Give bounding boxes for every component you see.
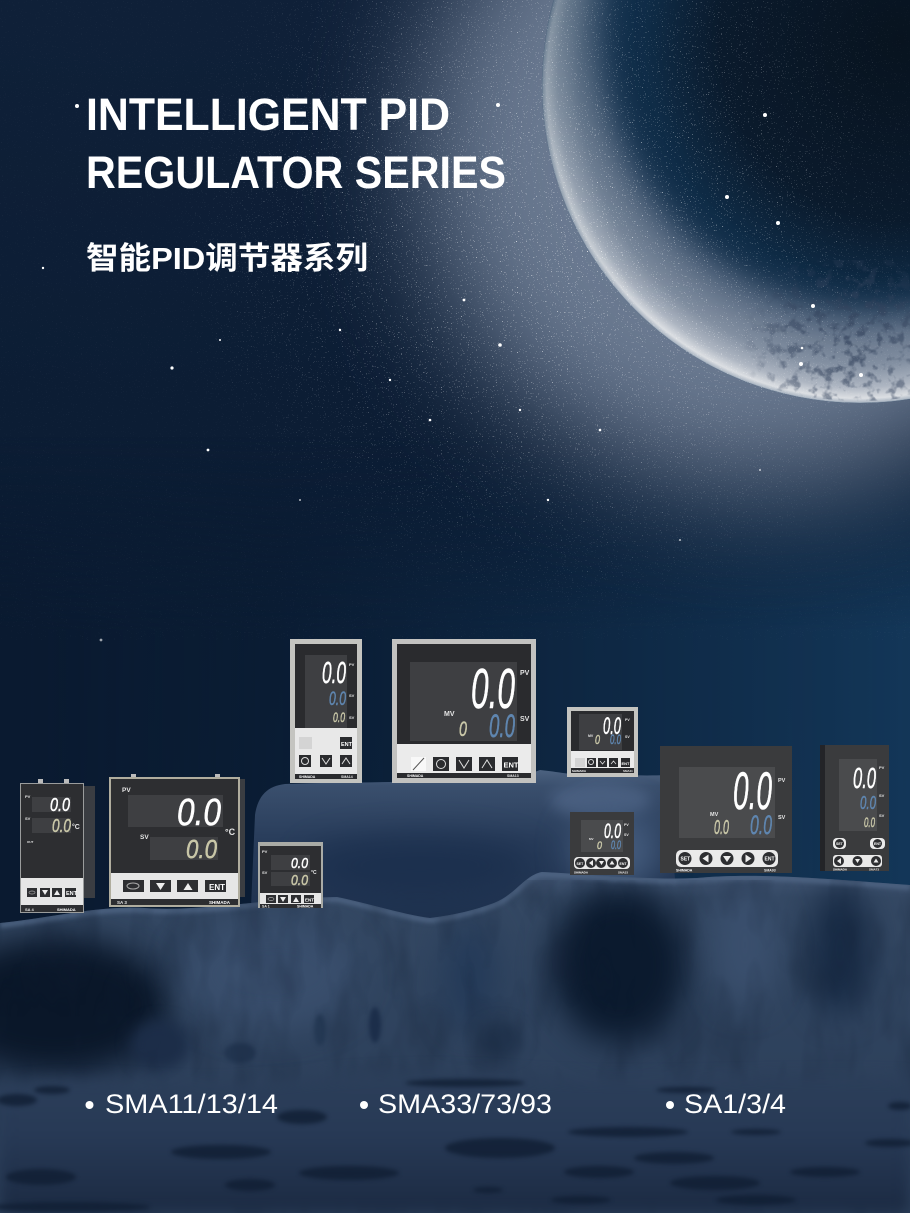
device: SMA33 controller: 0 [597,840,603,852]
device: SMA13 controller: SHIMADA [407,774,424,778]
device: SA3 controller: 0.0 [186,834,217,864]
title: INTELLIGENT PID [86,89,450,140]
device: SMA93 controller: 0.0 [714,817,729,839]
device: SMA11 controller: 0.0 [603,713,621,740]
device: SMA73 controller: 0.0 [853,763,876,795]
device: SA1 controller: SV [262,870,268,875]
device: SMA93 controller: ENT [764,856,774,862]
device: SMA33 controller: SET [576,862,584,866]
device: SMA93 controller [660,746,792,873]
terrain: front ledge [0,860,910,1213]
device: SMA13 controller: ENT [504,760,519,770]
device: SMA93 controller: 0.0 [733,762,772,821]
device: SA4 controller: °C [72,823,80,831]
device: SMA13 controller: SV [520,716,530,723]
device: SA3 controller: SHIMADA [209,900,231,905]
device: SMA14 controller: SV [349,715,355,720]
device: SMA33 controller: SV [624,833,629,837]
device: SA3 controller: °C [225,827,236,837]
device: SMA11 controller: SHIMADA [572,769,587,773]
device: SMA73 controller: SV [879,813,885,818]
background: night sky [370,476,910,885]
device: SMA93 controller: MV [710,812,719,818]
device: SMA13 controller: 0.0 [489,708,515,744]
device: SA1 controller: SA 1 [262,904,270,908]
device: SMA11 controller: ENT [622,761,630,766]
device: SMA33 controller: MV [589,837,594,841]
device: SMA14 controller: SMA14 [341,775,353,779]
device: SMA11 controller: PV [625,718,630,722]
device: SMA73 controller: SV [879,793,885,798]
device: SMA73 controller [820,745,889,871]
device: SMA93 controller: PV [778,778,786,784]
device: SMA93 controller: SV [778,815,786,821]
device: SMA11 controller: SV [625,735,630,739]
title: REGULATOR SERIES [86,147,506,198]
device: SMA13 controller: 0.0 [471,657,515,721]
device: SMA73 controller: SET [836,842,844,846]
device: SMA14 controller: SV [349,693,355,698]
device: SA1 controller [258,842,323,908]
device: SMA33 controller: SHIMADA [574,870,589,874]
device: SMA73 controller: 0.0 [864,814,875,830]
device: SMA93 controller: SHIMADA [676,868,693,872]
device: SMA93 controller: 0.0 [750,810,772,840]
device: SA4 controller [20,779,95,913]
device: SMA14 controller: SHIMADA [299,775,316,779]
device: SMA13 controller [392,639,536,783]
terrain: ground with craters [0,1072,910,1213]
device: SA1 controller: °C [311,870,317,876]
device: SA1 controller: ENT [305,898,314,902]
device: SA4 controller: SA 4 [25,907,35,912]
device: SMA14 controller: 0.0 [329,689,346,710]
device: SMA14 controller: 0.0 [333,709,345,725]
device: SA3 controller: 0.0 [177,792,221,834]
device: SMA11 controller: SMA11 [623,769,633,773]
device: SMA33 controller: 0.0 [611,838,621,852]
device: SMA13 controller: 0 [459,718,467,741]
device: SA4 controller: 0.0 [50,795,70,815]
device: SMA33 controller [570,812,634,875]
device: SA4 controller: PV [25,794,31,799]
device: SMA14 controller: 0.0 [322,655,346,690]
device: SA3 controller: SA 3 [117,900,127,905]
title [86,89,506,198]
device: SMA11 controller [567,707,638,777]
device: SMA13 controller: MV [444,711,455,718]
star field [0,0,910,641]
device: SMA73 controller: SMA73 [869,867,879,871]
device: SA4 controller: SHIMADA [57,907,76,912]
device: SMA73 controller: SHIMADA [833,867,848,871]
device: SA4 controller: ENT [66,891,78,897]
device: SMA33 controller: ENT [620,862,627,866]
label: SMA33/73/93: SMA33/73/93 [378,1089,552,1119]
device: SA1 controller: PV [262,849,268,854]
device: SMA11 controller: 0 [595,732,601,747]
label: SMA11/13/14: SMA11/13/14 [105,1089,278,1119]
device: SMA73 controller: ENT [874,842,882,846]
device: SMA93 controller: SET [680,856,690,862]
device: SMA73 controller: 0.0 [860,793,876,813]
device: SMA14 controller: ENT [341,742,353,748]
moon [542,0,910,410]
device: SA4 controller: SV [25,816,31,821]
device: SMA33 controller: PV [624,823,629,827]
terrain: upper ledge [250,770,680,930]
label: SA1/3/4: SA1/3/4 [684,1089,786,1119]
subtitle: 智能PID调节器系列 [86,241,368,276]
device: SA4 controller: 0.0 [52,816,71,836]
device: SA4 controller: OUT [27,840,34,844]
device: SMA73 controller: PV [879,765,885,770]
device: SA3 controller: PV [122,787,131,794]
device: SMA11 controller: MV [588,734,594,738]
device: SMA14 controller [290,639,362,783]
moon glow haze [420,0,910,490]
device: SMA13 controller: PV [520,670,530,677]
device: SMA33 controller: 0.0 [604,820,621,843]
device: SA3 controller: SV [140,834,149,841]
device: SA1 controller: 0.0 [291,872,309,889]
device: SMA33 controller: SMA33 [618,870,628,874]
device: SA3 controller: ENT [209,883,225,892]
device: SA1 controller: 0.0 [291,855,309,872]
device: SMA93 controller: SMA93 [764,868,776,872]
series labels [86,1089,786,1119]
device: SA3 controller [109,774,245,907]
device: SMA13 controller: SMA13 [507,774,519,778]
device: SMA14 controller: PV [349,662,355,667]
device: SMA11 controller: 0.0 [610,731,621,747]
device: SA1 controller: SHIMADA [297,904,314,908]
